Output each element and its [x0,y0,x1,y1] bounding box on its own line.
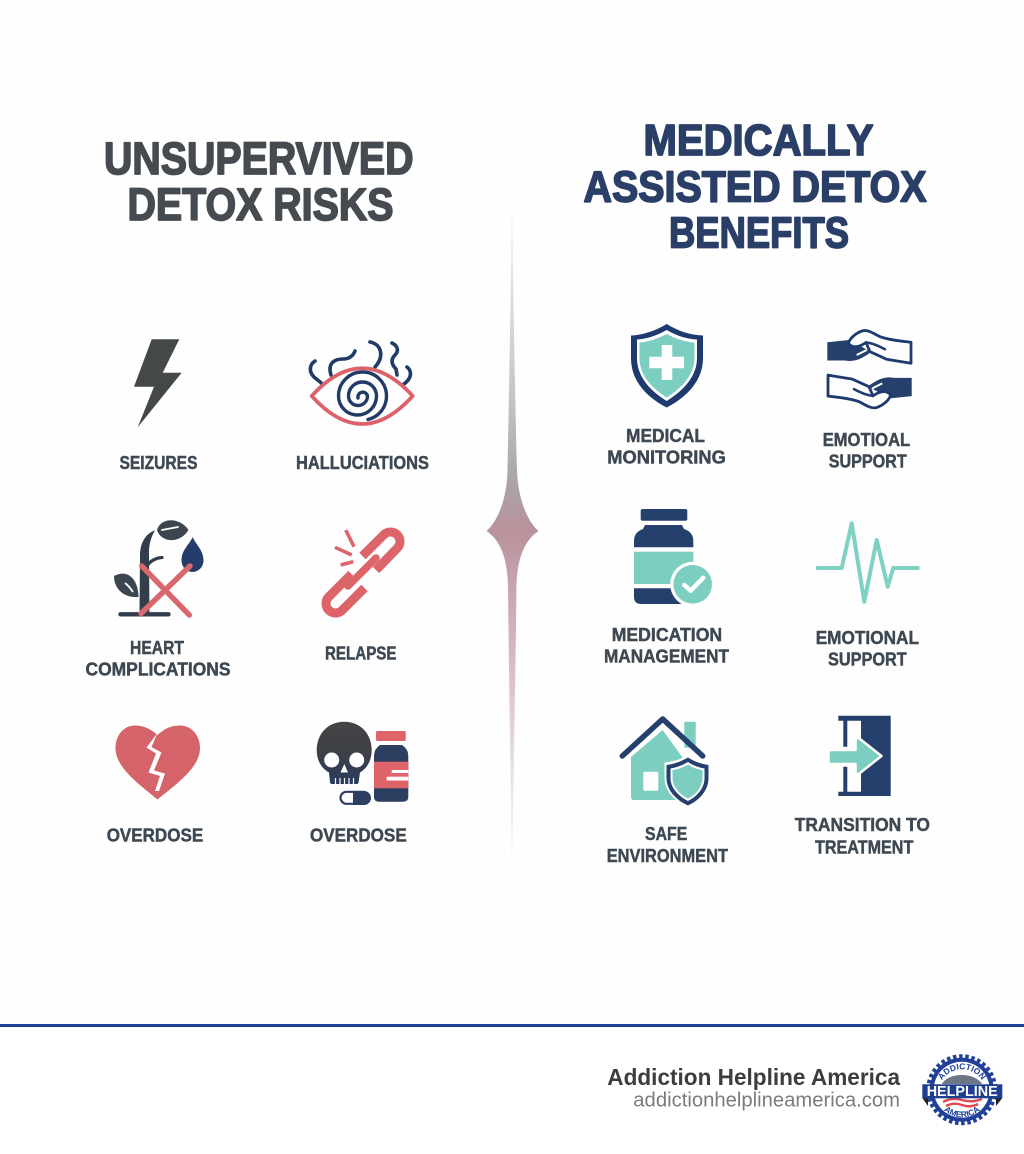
label: safe environment: SAFE [645,824,687,844]
logo badge [922,1054,1002,1126]
label: relapse: RELAPSE [325,644,396,664]
item: emotional support (pulse) [816,523,919,670]
item: safe environment [607,719,728,866]
logo badge: AMERICA [944,1107,980,1118]
footer [0,1024,1024,1126]
label: emotioal support [823,430,910,471]
icon: spiral eye [310,342,413,424]
panel: risks [86,339,429,846]
item: medication management [604,509,729,667]
item: heart complications [86,520,230,680]
label: emotioal support: EMOTIOAL [823,430,910,450]
label: emotional support: EMOTIONAL [816,628,919,648]
heading: unsupervised detox risks: DETOX RISKS [128,179,394,230]
label: medication management [604,625,729,667]
heading: medically assisted detox benefits [584,116,926,258]
item: transition to treatment [795,716,930,857]
label: safe environment [607,824,728,866]
label: heart complications [86,638,230,680]
item: overdose (broken heart) [107,726,203,846]
footer brand name: Addiction Helpline America [607,1064,900,1090]
label: overdose: OVERDOSE [107,826,203,846]
icon: wilting plant with cross [114,520,204,615]
label: emotioal support: SUPPORT [829,451,907,471]
label: medical monitoring [607,426,726,468]
icon: heartbeat pulse line [818,523,918,602]
item: emotional support (hands) [823,331,912,471]
item: seizures [120,339,198,473]
icon: broken heart [116,726,200,800]
label: hallucinations: HALLUCIATIONS [296,453,429,473]
label: medical monitoring: MONITORING [607,448,726,468]
heading: medically assisted detox benefits: MEDICALLY [644,116,874,165]
label: medical monitoring: MEDICAL [626,426,705,446]
item: medical monitoring [607,324,726,468]
label: transition to treatment: TREATMENT [815,837,913,857]
label: transition to treatment [795,815,930,857]
icon: medicine bottle with check [634,509,715,607]
label: emotional support: SUPPORT [828,650,907,670]
panel: benefits [604,324,930,866]
icon: door with arrow [828,716,891,796]
item: relapse [325,530,400,664]
heading: unsupervised detox risks: UNSUPERVIVED [104,133,414,184]
logo badge: HELPLINE [927,1084,998,1100]
label: medication management: MANAGEMENT [604,647,729,667]
label: heart complications: HEART [130,638,184,658]
item: overdose (skull and bottle) [310,722,408,846]
label: transition to treatment: TRANSITION TO [795,815,930,835]
label: overdose: OVERDOSE [310,826,407,846]
label: seizures: SEIZURES [120,453,198,473]
heading: medically assisted detox benefits: ASSISTED DETOX [584,162,926,212]
label: emotional support [816,628,919,670]
center divider with star [486,192,538,882]
footer url: addictionhelplineamerica.com [633,1090,900,1112]
item: hallucinations [296,342,429,473]
heading: medically assisted detox benefits: BENEFITS [669,208,849,258]
label: medication management: MEDICATION [612,625,722,645]
label: heart complications: COMPLICATIONS [86,660,230,680]
icon: skull, bottle and pill [317,722,408,805]
logo badge: ADDICTION [938,1063,986,1080]
icon: shield with cross [631,324,703,408]
icon: broken chain [326,530,400,613]
label: safe environment: ENVIRONMENT [607,846,728,866]
heading: unsupervised detox risks [104,133,414,230]
icon: caring hands [827,331,912,408]
icon: house with shield [622,719,710,808]
icon: lightning bolt [134,339,182,427]
